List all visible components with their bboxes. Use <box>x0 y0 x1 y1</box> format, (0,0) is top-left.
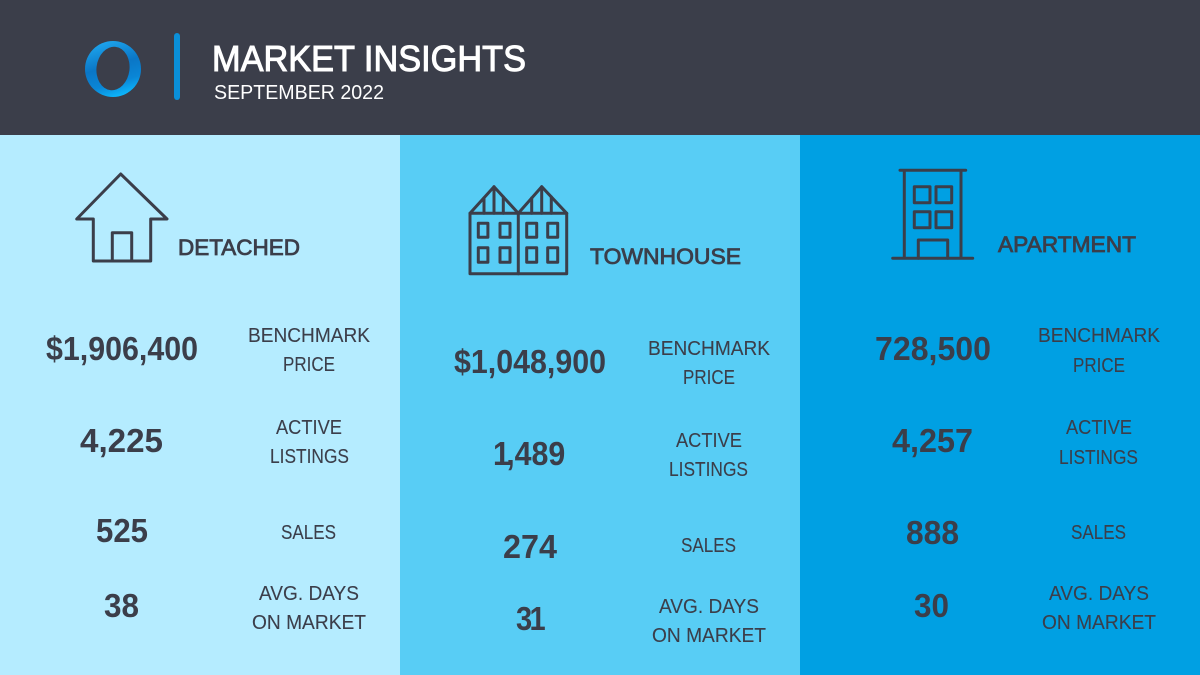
days on market label: AVG. DAYS <box>1049 583 1149 605</box>
days on market label <box>1042 583 1156 634</box>
benchmark price label <box>248 325 371 376</box>
panel: townhouse <box>400 135 800 675</box>
active listings label: LISTINGS <box>1059 447 1138 469</box>
benchmark price label: BENCHMARK <box>1038 325 1161 347</box>
benchmark price value: 728,500 <box>875 330 991 367</box>
benchmark price label: BENCHMARK <box>248 325 371 347</box>
active listings label: ACTIVE <box>676 430 742 452</box>
sales label: SALES <box>1071 522 1126 544</box>
active listings value: 1,489 <box>493 435 565 472</box>
heading: detached: DETACHED <box>178 235 300 260</box>
days on market label: AVG. DAYS <box>259 583 359 605</box>
days on market value: 38 <box>104 587 139 624</box>
icon: company logo ring <box>85 41 141 97</box>
days on market label: AVG. DAYS <box>659 596 759 618</box>
benchmark price label: PRICE <box>1073 355 1125 377</box>
days on market label: ON MARKET <box>652 625 766 647</box>
sales label: SALES <box>281 522 336 544</box>
active listings label: LISTINGS <box>669 459 748 481</box>
sales value: 888 <box>906 514 959 551</box>
panel: apartment <box>800 135 1200 675</box>
icon: apartment building <box>893 170 973 258</box>
benchmark price label <box>648 338 771 389</box>
active listings label <box>1059 417 1138 469</box>
benchmark price label: BENCHMARK <box>648 338 771 360</box>
days on market label: ON MARKET <box>252 612 366 634</box>
days on market value: 31 <box>516 600 546 637</box>
sales value: 525 <box>96 512 148 549</box>
active listings label <box>270 417 349 468</box>
icon: house <box>77 174 167 261</box>
benchmark price value: $1,906,400 <box>46 330 198 367</box>
days on market label <box>652 596 766 647</box>
benchmark price label <box>1038 325 1161 377</box>
active listings value: 4,257 <box>892 422 973 459</box>
title: MARKET INSIGHTS <box>212 38 526 79</box>
active listings label: LISTINGS <box>270 446 349 468</box>
days on market value: 30 <box>914 587 949 624</box>
panel: detached <box>0 135 400 675</box>
days on market label: ON MARKET <box>1042 612 1156 634</box>
days on market label <box>252 583 366 634</box>
sales label: SALES <box>681 535 736 557</box>
active listings label: ACTIVE <box>276 417 342 439</box>
icon: townhouse <box>470 187 567 274</box>
benchmark price label: PRICE <box>283 354 335 376</box>
sales value: 274 <box>503 528 558 565</box>
subtitle: SEPTEMBER 2022 <box>214 82 384 104</box>
benchmark price label: PRICE <box>683 367 735 389</box>
header band <box>0 0 1200 135</box>
heading: townhouse: TOWNHOUSE <box>590 244 741 269</box>
active listings label <box>669 430 748 481</box>
header divider bar <box>174 33 180 100</box>
active listings value: 4,225 <box>80 422 163 459</box>
active listings label: ACTIVE <box>1066 417 1132 439</box>
benchmark price value: $1,048,900 <box>454 343 606 380</box>
heading: apartment: APARTMENT <box>998 232 1136 257</box>
